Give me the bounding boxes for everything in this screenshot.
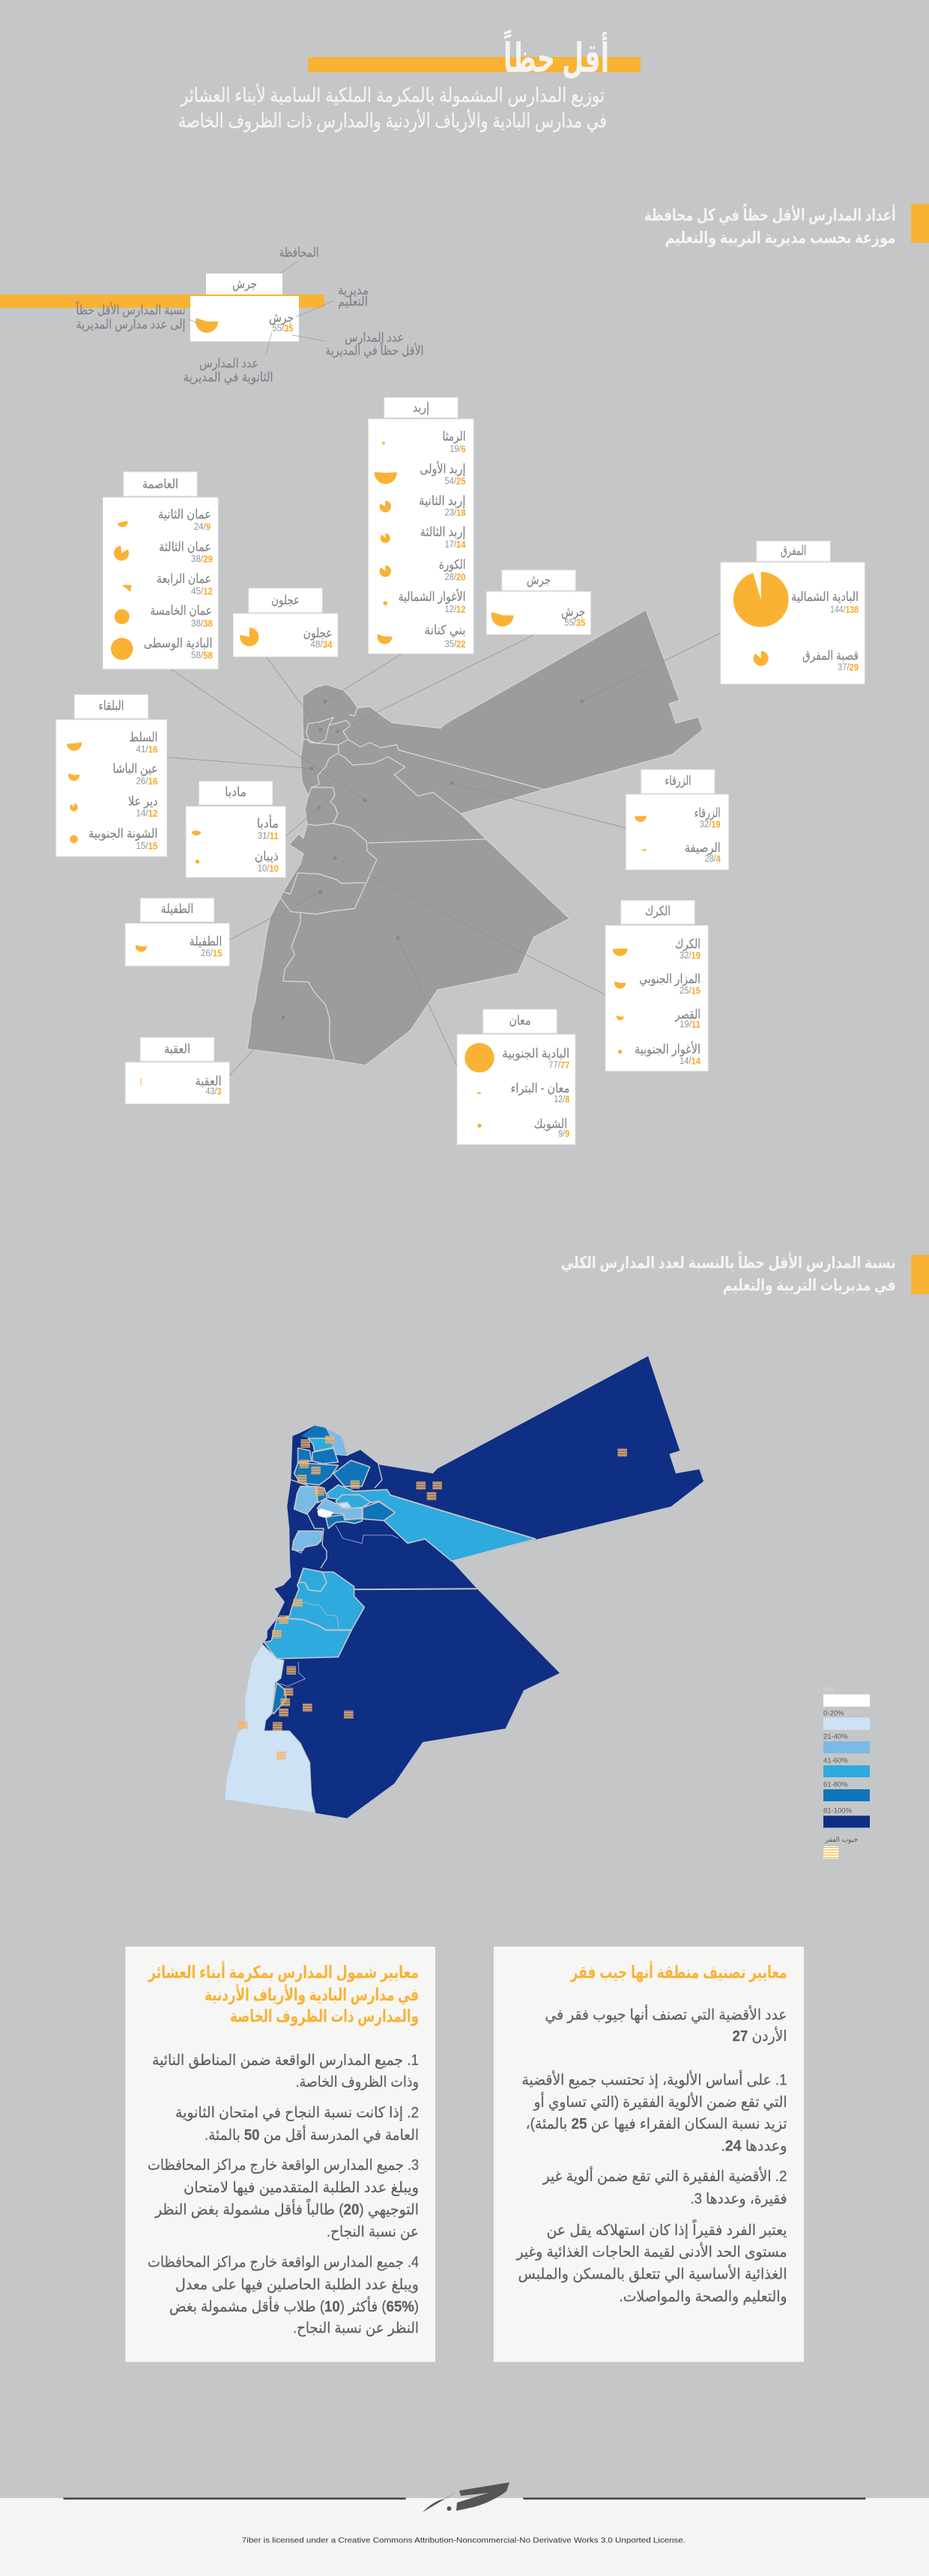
panel: Zarqa [626, 770, 728, 870]
panel: Jerash [487, 570, 590, 635]
panel: Zarqa: 28/4 [705, 853, 721, 864]
panel: Balqa: البلقاء [99, 698, 124, 713]
heading: inclusion criteria: معايير شمول المدارس بمكرمة أبناء العشائر [148, 1960, 419, 1983]
panel: Maan [457, 1009, 575, 1144]
panel: Balqa: عين الباشا [112, 761, 157, 776]
text: inclusion criteria list: 2. إذا كانت نسبة النجاح في امتحان الثانوية [175, 2105, 419, 2122]
panel: Irbid: 17/14 [445, 538, 466, 550]
panel: Madaba [186, 781, 285, 877]
panel: Tafila: الطفيلة [190, 934, 222, 949]
panel: Irbid: الكورة [439, 557, 466, 572]
panel: Maan: 77/77 [548, 1059, 569, 1070]
panel: Amman: البادية الوسطى [144, 636, 213, 650]
legend key: how to read a panel: عدد المدارس [345, 330, 404, 345]
panel: Irbid: 35/22 [445, 638, 466, 649]
map legend: 61-80% [823, 1780, 848, 1789]
text: inclusion criteria list: ويبلغ عدد الطلبة الحاصلين فيها على معدل [175, 2276, 419, 2293]
legend key: how to read a panel: المحافظة [279, 246, 319, 259]
panel: Mafraq: البادية الشمالية [791, 590, 859, 604]
panel: Irbid: 54/25 [445, 475, 466, 486]
map legend: 0% [823, 1686, 834, 1695]
poverty pockets [238, 1436, 627, 1759]
text: inclusion criteria list: التوجيهي (20) طالباً فأقل مشمولة بغض النظر [154, 2198, 419, 2219]
text: poverty pocket explanation: الأردن 27 [733, 2027, 787, 2045]
map legend: 21-40% [823, 1732, 848, 1741]
legend key: how to read a panel: 55/35 [273, 322, 294, 333]
panel: Zarqa: الزرقاء [665, 773, 691, 788]
text: inclusion criteria list: ويبلغ عدد الطلبة المتقدمين فيها لامتحان [184, 2180, 419, 2196]
panel: Mafraq: 144/138 [830, 604, 859, 614]
text: poverty pocket explanation: يعتبر الفرد فقيراً إذا كان استهلاكه يقل عن [547, 2219, 787, 2240]
panel: Madaba: 31/11 [258, 830, 279, 841]
panel: Irbid: إربد الثانية [419, 494, 466, 508]
panel: Ajloun [234, 588, 338, 656]
legend key: how to read a panel: مديرية [338, 283, 369, 297]
panel: Amman [103, 472, 218, 669]
panel: Maan: 9/9 [558, 1128, 569, 1139]
map legend [823, 1686, 870, 1859]
panel: Karak: 19/11 [680, 1018, 700, 1030]
text: inclusion criteria list: 3. جميع المدارس الواقعة خارج مراكز المحافظات [148, 2157, 419, 2174]
panel: Madaba: 10/10 [258, 862, 279, 874]
legend key: how to read a panel [0, 246, 423, 385]
heading: inclusion criteria: في مدارس البادية والأرياف الأردنية [205, 1983, 419, 2005]
legend key: how to read a panel: الأقل حظاً في المديرية [325, 341, 423, 358]
footer rules [64, 2497, 865, 2500]
map legend: 41-60% [823, 1756, 848, 1765]
heading: inclusion criteria [148, 1960, 419, 2026]
panel: Jerash: جرش [561, 605, 585, 619]
legend key: how to read a panel: جرش [269, 310, 294, 325]
panel: Amman: عمان الثالثة [159, 539, 211, 554]
license text: 7iber is licensed under a Creative Commons Attribution-Noncommercial-No Derivative Works 3.0 Unported License. [242, 2536, 686, 2545]
text: poverty pocket explanation [516, 2005, 787, 2305]
text: poverty pocket explanation: 1. على أساس الألوية، إذ تحتسب جميع الأقضية [521, 2070, 787, 2090]
text: poverty pocket explanation: مستوى الحد الأدنى لقيمة الحاجات الغذائية وغير [516, 2243, 787, 2261]
panel: Mafraq: 37/29 [838, 661, 859, 673]
panel: Aqaba: 43/3 [205, 1085, 222, 1097]
panel: Maan: البادية الجنوبية [502, 1046, 569, 1061]
legend key: how to read a panel: عدد المدارس [199, 357, 258, 370]
text: inclusion criteria list: النظر عن نسبة النجاح. [293, 2320, 419, 2337]
text: poverty pocket explanation: عدد الأقضية التي تصنف أنها جيوب فقر في [545, 2005, 787, 2025]
logo: 7iber [423, 2482, 509, 2512]
panel: Irbid: الأغوار الشمالية [399, 589, 466, 604]
panel: Zarqa: الرصيفة [685, 841, 721, 855]
panel: Ajloun: عجلون [303, 626, 333, 640]
panel: Maan: الشوبك [534, 1116, 567, 1131]
panel: Irbid [369, 398, 473, 653]
map legend: 0-20% [823, 1710, 844, 1717]
footer band [0, 2498, 929, 2576]
panel: Zarqa: الزرقاء [695, 806, 721, 820]
panel: Karak: 25/15 [680, 985, 700, 996]
panel: Karak [605, 901, 708, 1071]
panel: Ajloun: 48/34 [310, 638, 333, 650]
title: أقل حظاً [503, 29, 609, 81]
text: poverty pocket explanation: وعددها 24. [721, 2138, 787, 2155]
panel: Mafraq [721, 541, 865, 684]
panel: Irbid: 28/20 [445, 571, 466, 582]
text: poverty pocket explanation: الغذائية الأساسية الي تتعلق بالمسكن والملبس [518, 2264, 787, 2283]
panel: Jerash: جرش [527, 572, 551, 587]
panel: Mafraq: قصبة المفرق [802, 649, 859, 662]
panel: Balqa: 26/16 [136, 775, 157, 787]
text: poverty pocket explanation: فقيرة، وعددها 3. [691, 2191, 787, 2207]
panel: Irbid: إربد الثالثة [420, 524, 466, 539]
panel: Irbid: إربد الأولى [420, 462, 466, 477]
grey map of Jordan [247, 610, 703, 1065]
panel: Amman: عمان الخامسة [150, 604, 212, 617]
panel: Zarqa: 32/19 [700, 818, 721, 829]
panel: Irbid: 23/18 [445, 507, 466, 518]
panel: Karak: القصر [674, 1007, 700, 1022]
text: inclusion criteria list: وذات الظروف الخاصة. [296, 2074, 419, 2090]
panel: Amman: عمان الثانية [158, 507, 211, 521]
subtitle [178, 82, 607, 133]
panel: Karak: 32/19 [680, 949, 700, 961]
panel: Amman: 58/58 [191, 649, 213, 661]
subtitle: في مدارس البادية والأرياف الأردنية والمدارس ذات الظروف الخاصة [178, 108, 607, 133]
panel: Amman: 24/9 [194, 521, 211, 532]
panel: Karak: 14/14 [680, 1055, 701, 1066]
text: inclusion criteria list: عن نسبة النجاح. [327, 2224, 419, 2240]
panel: school inclusion criteria [125, 1947, 435, 2362]
panel: Irbid: الرمثا [442, 429, 466, 444]
panel: Irbid: 12/12 [445, 603, 466, 614]
section heading: share of schools [561, 1251, 929, 1295]
map legend: جيوب الفقر [824, 1836, 858, 1844]
panel: Mafraq: المفرق [781, 544, 806, 557]
panel: Madaba: مادبا [225, 785, 246, 799]
choropleth map [225, 1356, 703, 1818]
legend key: how to read a panel: نسبة المدارس الأقل حظاً [76, 300, 186, 318]
text: poverty pocket explanation: التي تقع ضمن الألوية الفقيرة (التي تساوي أو [533, 2092, 787, 2111]
panel: Maan: معان - البتراء [511, 1081, 569, 1095]
panel: Amman: العاصمة [142, 477, 178, 492]
text: inclusion criteria list: (65%) فأكثر (10) طلاب فأقل مشمولة بغض [169, 2296, 419, 2315]
panel: poverty pocket criteria [494, 1947, 804, 2362]
panel: Madaba: مأدبا [257, 814, 279, 830]
panel: Karak: الأغوار الجنوبية [635, 1041, 700, 1056]
panel: Amman: عمان الرابعة [157, 572, 211, 586]
panel: Maan: معان [509, 1013, 530, 1028]
panel: Balqa [56, 695, 166, 856]
panel: Tafila [125, 898, 229, 966]
text: poverty pocket explanation: والتعليم والصحة والمواصلات. [619, 2288, 787, 2305]
text: poverty pocket explanation: تزيد نسبة السكان الفقراء فيها عن 25 بالمئة)، [525, 2116, 787, 2132]
heading: inclusion criteria: والمدارس ذات الظروف الخاصة [230, 2007, 419, 2026]
panel: Balqa: 41/16 [136, 743, 157, 755]
panel: Amman: 38/29 [191, 553, 213, 564]
panel: Karak: المزار الجنوبي [639, 972, 700, 987]
heading: poverty pocket criteria: معايير تصنيف منطقة أنها جيب فقر [570, 1960, 787, 1983]
panel: Jerash: 55/35 [564, 617, 585, 628]
section heading: school counts [644, 203, 929, 247]
panel: Irbid: بني كنانة [424, 623, 466, 638]
legend key: how to read a panel: إلى عدد مدارس المديرية [76, 318, 186, 331]
panel: Irbid: إربد [413, 400, 429, 415]
panel: Aqaba: العقبة [195, 1074, 222, 1088]
text: inclusion criteria list [148, 2052, 419, 2337]
panel: Maan: 12/8 [554, 1093, 569, 1104]
subtitle: توزيع المدارس المشمولة بالمكرمة الملكية السامية لأبناء العشائر [179, 82, 605, 107]
panel: Balqa: السلط [129, 730, 157, 745]
text: inclusion criteria list: 1. جميع المدارس الواقعة ضمن المناطق النائية [152, 2052, 419, 2069]
panel: Balqa: 15/15 [136, 840, 157, 851]
panel: Ajloun: عجلون [271, 593, 300, 607]
panel: Balqa: الشونة الجنوبية [88, 826, 157, 841]
panel: Karak: الكرك [645, 904, 671, 919]
panel: Amman: 45/12 [191, 585, 213, 596]
panel: Balqa: 14/12 [136, 808, 157, 818]
panel: Madaba: ذيبان [255, 849, 279, 863]
panel: Tafila: الطفيلة [161, 902, 193, 916]
panel: Aqaba: العقبة [164, 1041, 190, 1056]
panel: Irbid: 19/6 [450, 443, 466, 454]
panel: Karak: الكرك [675, 937, 700, 952]
title [308, 29, 641, 81]
legend key: how to read a panel: التعليم [338, 294, 368, 309]
leader lines and region dots [166, 633, 721, 1076]
legend key: how to read a panel: الثانوية في المديرية [184, 370, 273, 385]
text: inclusion criteria list: 4. جميع المدارس الواقعة خارج مراكز المحافظات [148, 2254, 419, 2270]
text: poverty pocket explanation: 2. الأقضية الفقيرة التي تقع ضمن ألوية غير [542, 2166, 787, 2186]
map legend: 81-100% [823, 1807, 853, 1815]
legend key: how to read a panel: جرش [232, 277, 257, 291]
panel: Tafila: 26/15 [201, 947, 222, 958]
panel: Aqaba [125, 1038, 229, 1104]
panel: Balqa: دير علا [128, 794, 157, 808]
panel: Amman: 38/38 [191, 617, 213, 629]
text: inclusion criteria list: العامة في المدرسة أقل من 50 بالمئة. [205, 2125, 419, 2144]
